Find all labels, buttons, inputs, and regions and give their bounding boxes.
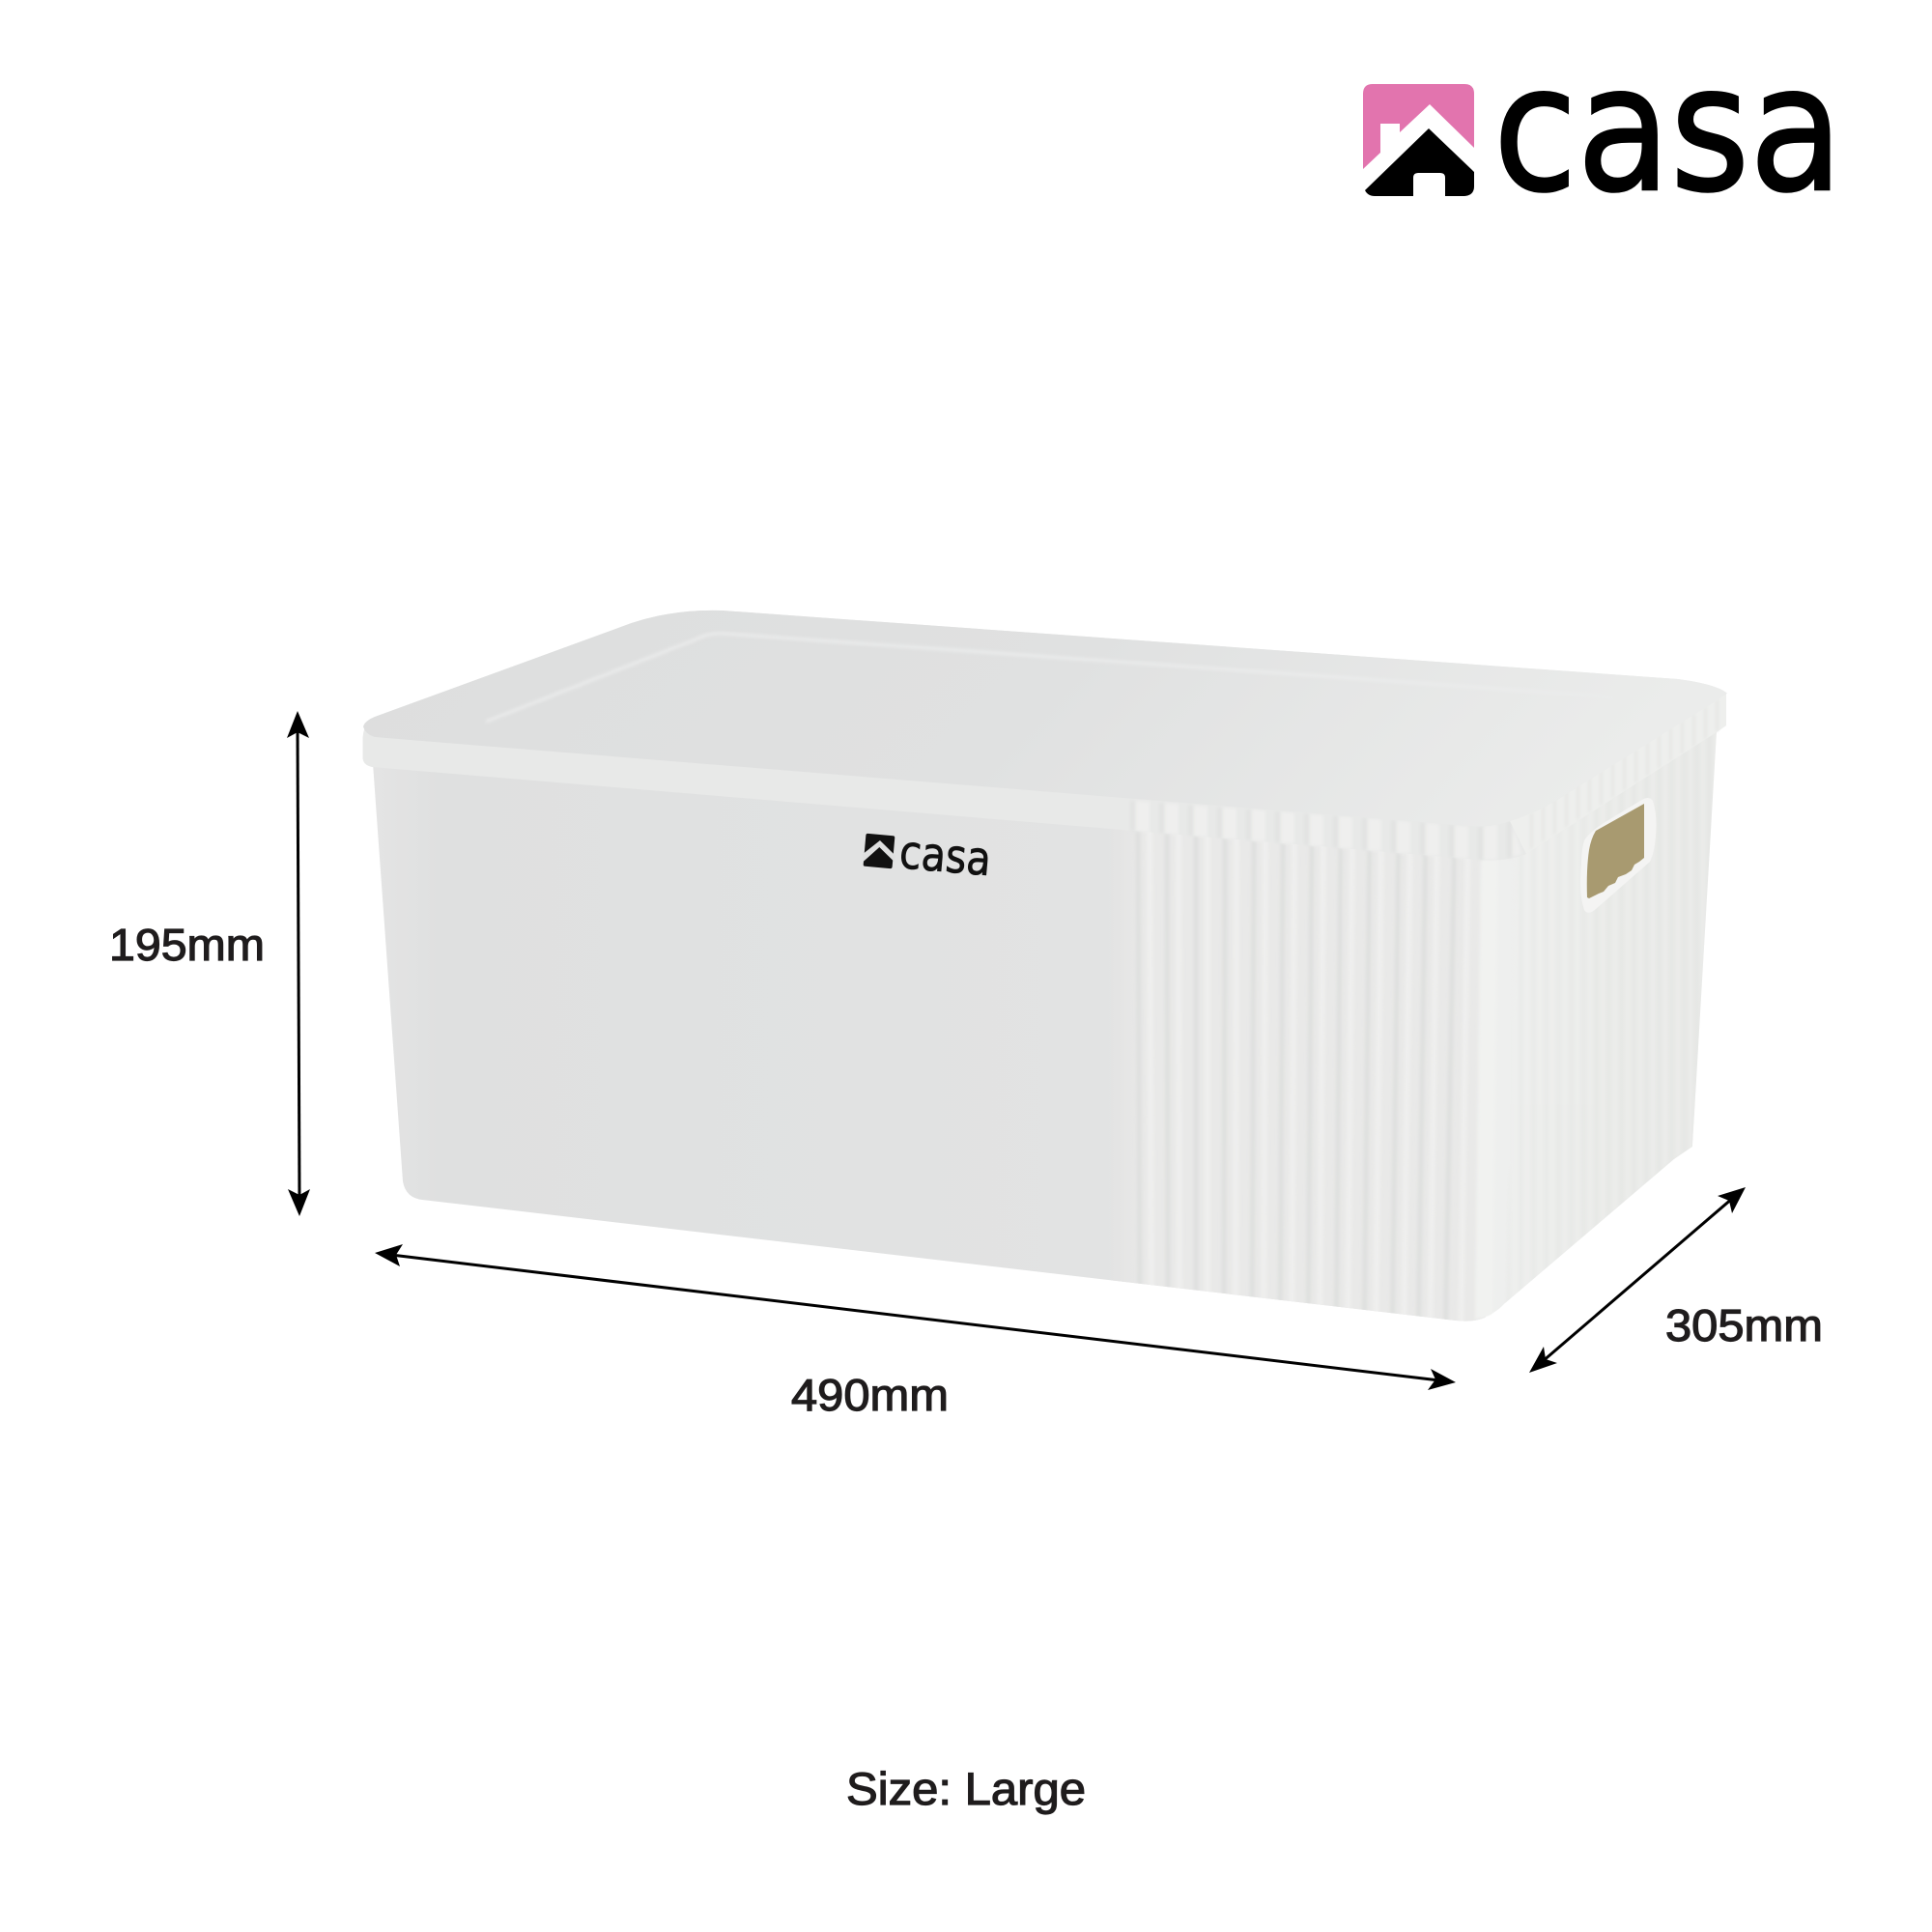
handle rim (1580, 798, 1657, 913)
box body (373, 715, 1719, 1352)
size caption: Size: Large (846, 1763, 1086, 1814)
arrow: depth (1529, 1187, 1746, 1373)
small casa logo on box (862, 824, 993, 887)
brand logo (1363, 28, 1843, 231)
handle opening with scalloped lower edge (1587, 804, 1644, 898)
height label: 195mm (109, 920, 265, 970)
icon: pink square with roof (1363, 84, 1474, 196)
width label: 490mm (791, 1370, 949, 1420)
lid top surface (363, 611, 1727, 826)
front ribbed panel (1138, 833, 1486, 1321)
storage box (363, 611, 1727, 1352)
lid raised inset line (486, 634, 1613, 722)
wordmark: casa (1493, 28, 1843, 231)
lid ribbed side edge (1510, 693, 1726, 854)
small wordmark: casa (897, 824, 993, 887)
handle cut-out (1580, 798, 1657, 913)
arrow: height (287, 711, 310, 1216)
lid (363, 611, 1727, 861)
depth label: 305mm (1665, 1300, 1823, 1350)
lid ribbed front edge (1122, 800, 1521, 860)
lid silhouette and edge (363, 611, 1726, 861)
side panel (1475, 715, 1719, 1320)
infographic canvas (112, 84, 1830, 1815)
small logo icon (862, 834, 896, 868)
arrow: width (375, 1244, 1456, 1390)
